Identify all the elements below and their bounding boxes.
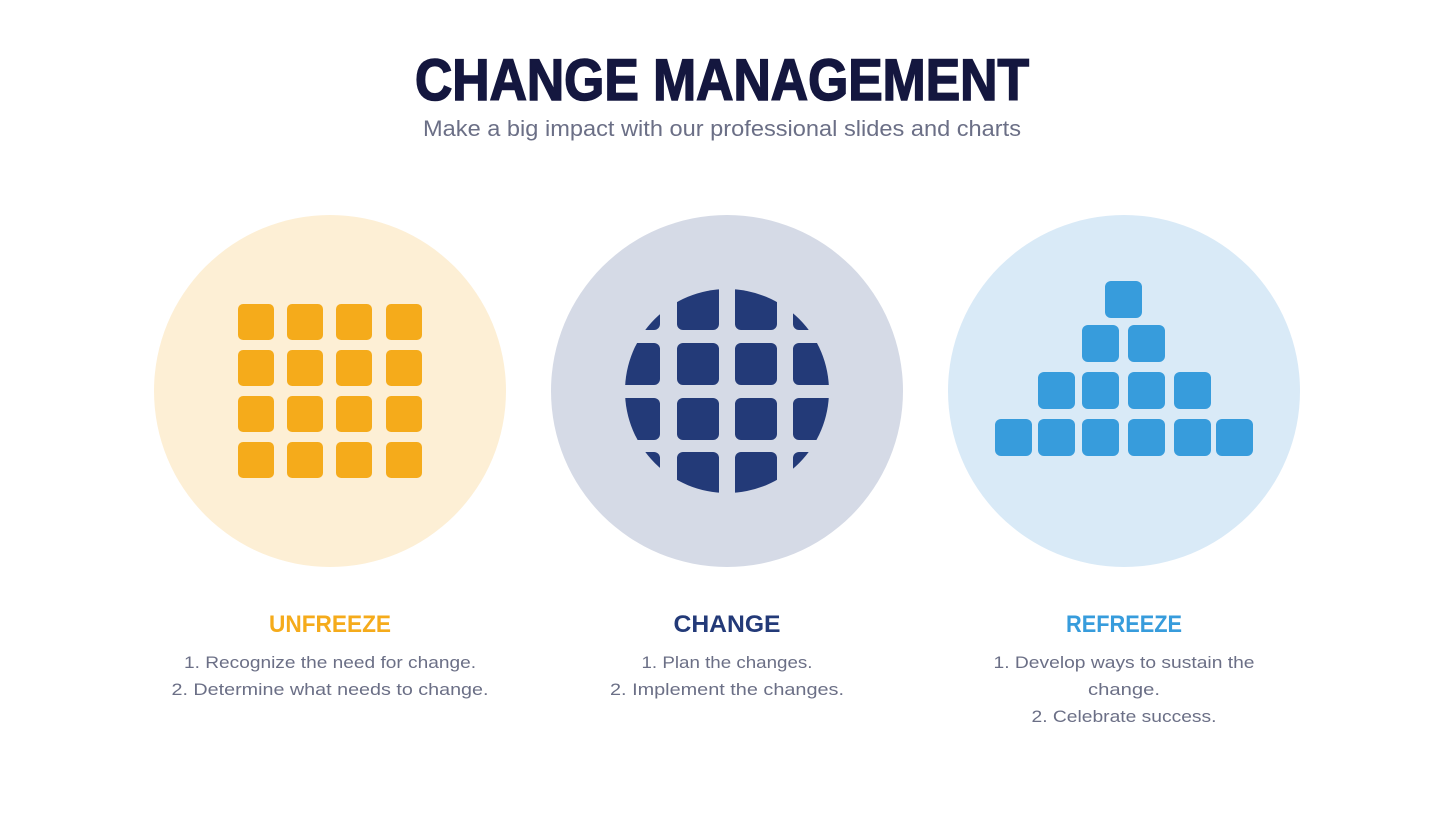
circle: refreeze [948,215,1300,567]
icon: globe grid [625,289,829,493]
text: refreeze: 1. Develop ways to sustain the [994,653,1254,672]
circle: unfreeze [154,215,506,567]
text: unfreeze [172,653,488,699]
panel: unfreeze [154,215,506,699]
panel: refreeze [948,215,1300,726]
heading: change: CHANGE [674,611,780,638]
heading: refreeze: REFREEZE [1066,611,1182,638]
text: unfreeze: 2. Determine what needs to change. [172,680,488,699]
icon: yellow grid [238,304,422,478]
text: refreeze: 2. Celebrate success. [1032,707,1216,726]
circle: change [551,215,903,567]
text: change: 2. Implement the changes. [610,680,844,699]
panel: change [551,215,903,699]
text: unfreeze: 1. Recognize the need for change. [184,653,476,672]
text: change: 1. Plan the changes. [642,653,812,672]
text: change [610,653,844,699]
text: refreeze: change. [1088,680,1160,699]
title: CHANGE MANAGEMENT [415,48,1029,113]
text: refreeze [994,653,1254,726]
heading: unfreeze: UNFREEZE [269,611,391,638]
icon: pyramid [995,281,1253,456]
subtitle: Make a big impact with our professional slides and charts [423,116,1021,141]
